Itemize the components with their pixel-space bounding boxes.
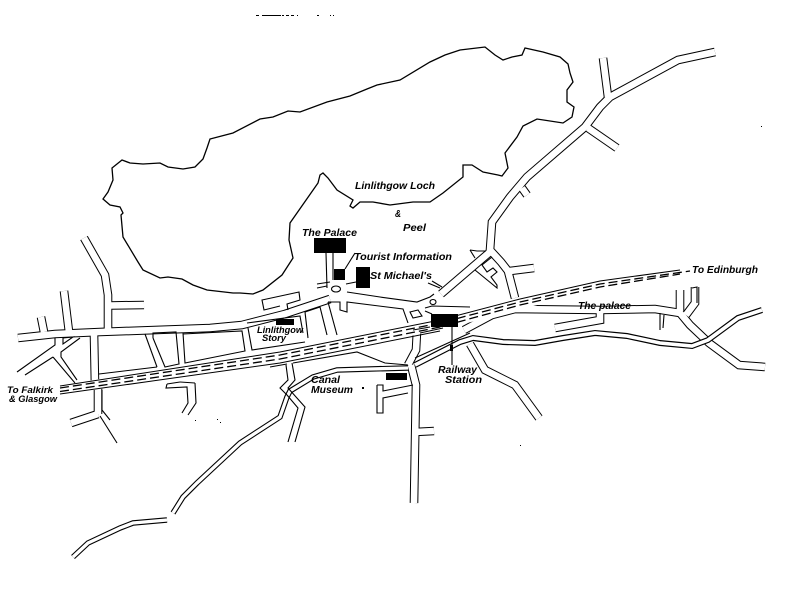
label: Tourist Information: Tourist Information	[354, 252, 452, 263]
street blocks and side streets	[17, 250, 697, 443]
label: The Palace: The Palace	[302, 228, 357, 239]
label: The palace: The palace	[578, 301, 631, 312]
building: The Palace	[314, 238, 346, 253]
canal	[73, 310, 762, 557]
label: ampersand: &	[395, 208, 401, 220]
label: St Michael's: St Michael's	[370, 271, 432, 282]
pointer: Railway Station	[450, 327, 453, 365]
building: St Michael's	[356, 267, 370, 288]
label: Canal Museum: Museum	[311, 385, 353, 396]
label: To Edinburgh: To Edinburgh	[692, 265, 758, 276]
label: Peel: Peel	[403, 222, 427, 234]
loch shoreline	[103, 47, 574, 294]
label: Linlithgow Story	[257, 325, 304, 343]
building: Tourist Information	[334, 269, 345, 280]
label: Linlithgow Story: Linlithgow	[257, 325, 304, 335]
label: Canal Museum	[311, 375, 353, 396]
building: Railway Station	[431, 314, 458, 327]
label: Linlithgow Story: Story	[262, 333, 287, 343]
building: Linlithgow Story	[276, 319, 294, 325]
label: Railway Station: Railway	[438, 365, 477, 376]
road network	[18, 52, 765, 503]
label: To Falkirk & Glasgow	[7, 385, 58, 404]
label: Railway Station: Station	[445, 375, 482, 386]
building: Canal Museum	[386, 373, 407, 380]
railway line	[60, 270, 690, 394]
label: Railway Station	[438, 365, 482, 386]
label: Linlithgow Loch: Linlithgow Loch	[355, 180, 435, 192]
label: To Falkirk & Glasgow: To Falkirk	[7, 385, 54, 395]
pointer: Tourist Information	[345, 253, 355, 269]
label: Canal Museum: Canal	[311, 375, 340, 386]
label: To Falkirk & Glasgow: & Glasgow	[9, 394, 58, 404]
